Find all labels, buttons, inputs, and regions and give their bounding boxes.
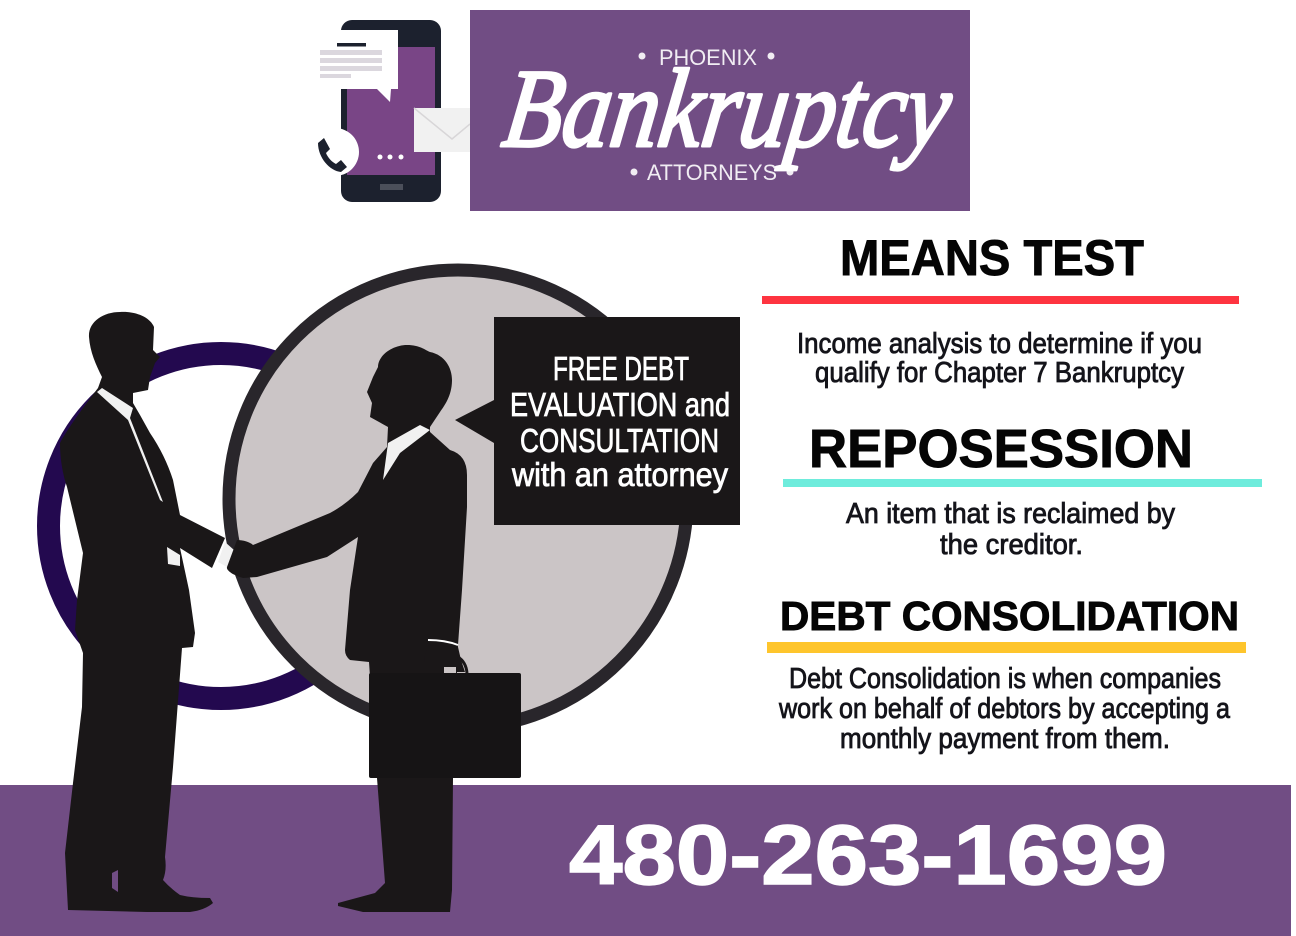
phone number: 480-263-1699 <box>569 808 1167 902</box>
large grey circle <box>229 270 687 728</box>
section: means test <box>762 230 1239 389</box>
icon: smartphone with messages <box>311 20 470 202</box>
briefcase <box>369 673 521 778</box>
section: debt consolidation <box>767 593 1246 755</box>
callout: free debt evaluation <box>455 317 740 525</box>
section: means test: MEANS TEST <box>840 230 1144 286</box>
logo panel: Bankruptcy <box>497 47 960 171</box>
logo panel: ATTORNEYS <box>647 160 777 185</box>
logo panel: PHOENIX <box>659 45 757 70</box>
logo panel <box>470 10 970 211</box>
footer band <box>0 785 1291 936</box>
callout: free debt evaluation: FREE DEBT <box>553 350 689 387</box>
purple ring <box>48 354 394 698</box>
section: debt consolidation: DEBT CONSOLIDATION <box>780 593 1239 639</box>
section: means test: qualify for Chapter 7 Bankruptcy <box>815 357 1184 389</box>
section: means test: Income analysis to determine if you <box>797 328 1202 360</box>
section: reposession: An item that is reclaimed by <box>846 498 1175 530</box>
section: debt consolidation: work on behalf of debtors by accepting a <box>778 693 1231 725</box>
callout: free debt evaluation: CONSULTATION <box>520 422 719 459</box>
callout: free debt evaluation: with an attorney <box>511 456 728 493</box>
callout: free debt evaluation: EVALUATION and <box>510 386 730 423</box>
silhouette: left businessman <box>60 312 234 912</box>
silhouette: right businessman <box>227 345 467 912</box>
section: reposession: REPOSESSION <box>809 419 1193 479</box>
section: debt consolidation: Debt Consolidation is when companies <box>789 663 1221 695</box>
section: debt consolidation: monthly payment from them. <box>840 723 1170 755</box>
section: reposession <box>783 419 1262 561</box>
section: reposession: the creditor. <box>940 529 1083 561</box>
